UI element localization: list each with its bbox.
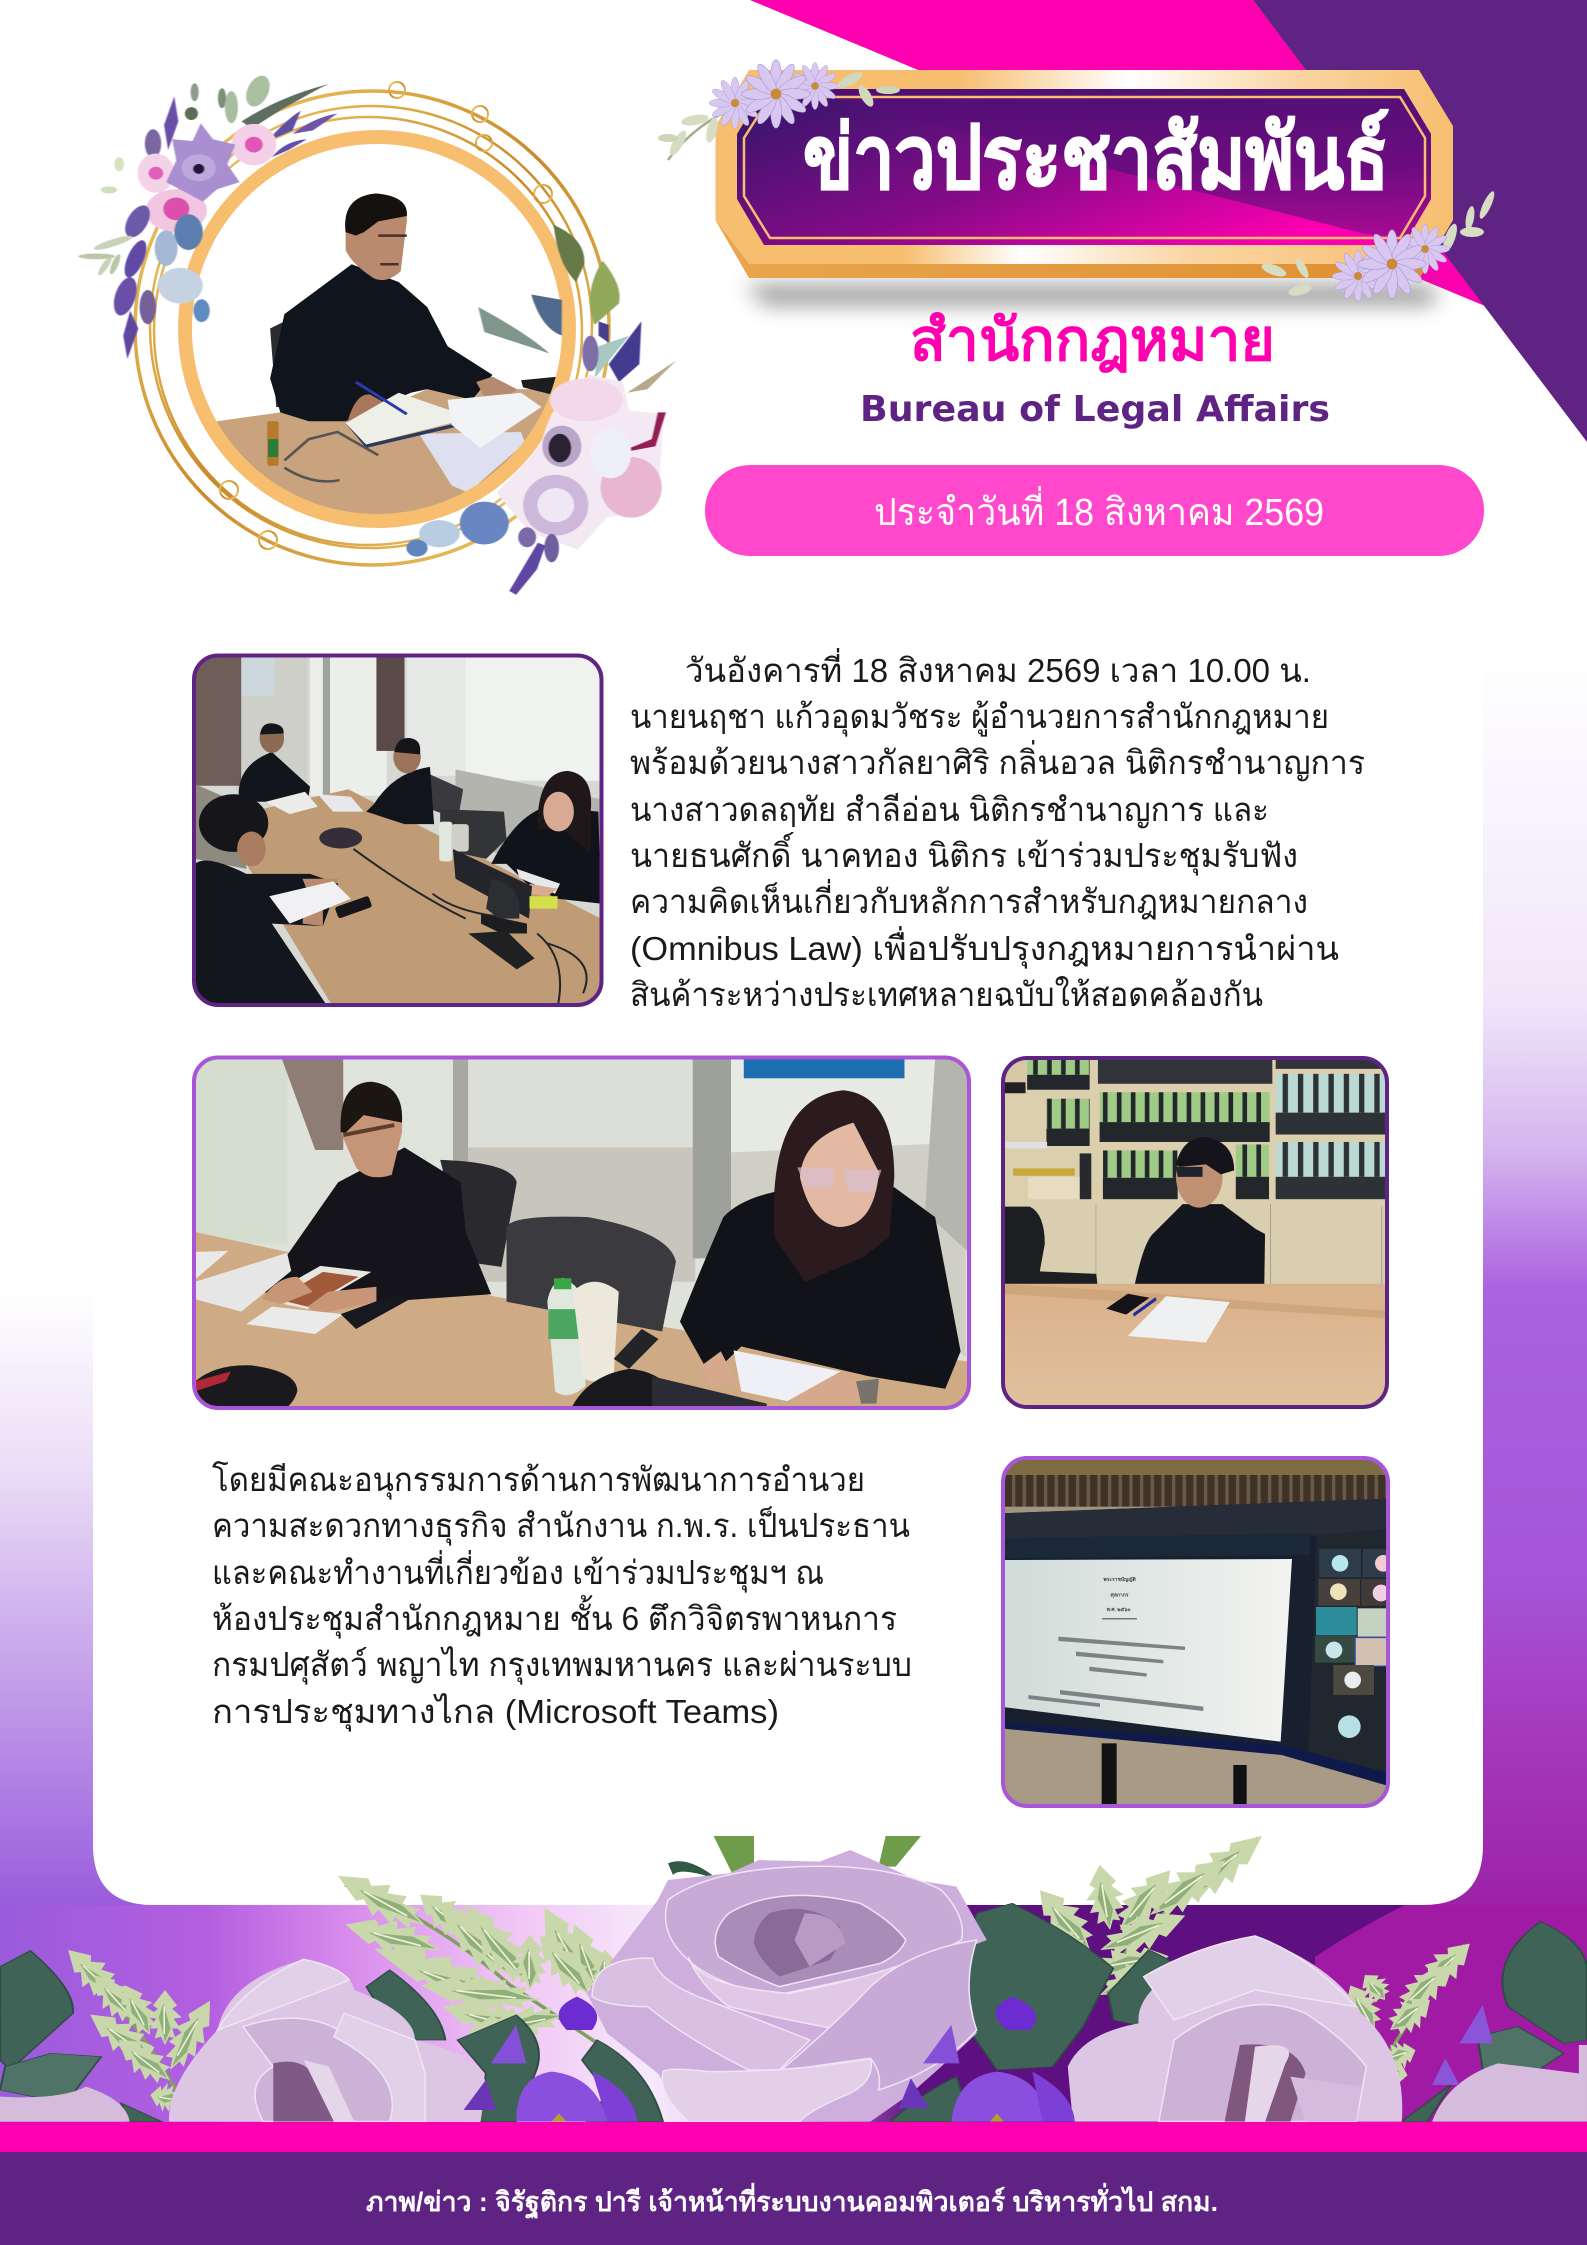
leaves: [0, 1903, 1587, 2122]
date pill: ประจำวันที่ 18 สิงหาคม 2569: [874, 486, 1324, 534]
footer magenta bar: [0, 2122, 1587, 2152]
heading: bureau name English: Bureau of Legal Affairs: [860, 389, 1330, 430]
far right rose: [1432, 2045, 1587, 2122]
text block: second paragraph: การประชุมทางไกล (Microsoft Teams): [212, 1693, 779, 1732]
date pill: [705, 465, 1484, 556]
gold rings: [135, 82, 609, 565]
text block: second paragraph: ความสะดวกทางธุรกิจ สำนักงาน ก.พ.ร. เป็นประธาน: [212, 1506, 910, 1546]
purple petunias: [464, 1997, 1493, 2122]
left rose: [169, 1959, 486, 2122]
photo 4: video conference screen: [1000, 1455, 1397, 1815]
text block: first paragraph: พร้อมด้วยนางสาวกัลยาศิริ กลิ่นอวล นิติกรชำนาญการ: [630, 740, 1365, 781]
header banner: [716, 70, 1453, 306]
floral cluster lower right: [406, 225, 676, 593]
photo 2 frame: [194, 1058, 969, 1408]
text block: second paragraph: ห้องประชุมสำนักกฎหมาย ชั้น 6 ตึกวิจิตรพาหนการ: [212, 1595, 897, 1639]
text block: first paragraph: นางสาวดลฤทัย สำลีอ่อน นิติกรชำนาญการ และ: [630, 791, 1269, 828]
floral border: [0, 1836, 1587, 2122]
ferns behind the floral border: [57, 1821, 1481, 2114]
footer purple bar: [0, 2152, 1587, 2245]
text block: second paragraph: [212, 1461, 912, 1732]
far left rose: [0, 2087, 130, 2122]
portrait medallion: [78, 73, 676, 593]
text block: first paragraph: [630, 648, 1365, 1013]
photo 1 frame: [194, 656, 602, 1005]
banner flowers bottom-right: [1260, 190, 1497, 302]
screen document text: พระราชบัญญัติ: [1103, 1576, 1136, 1583]
right rose: [1068, 1936, 1402, 2122]
banner flowers top-left: [658, 60, 900, 160]
text block: second paragraph: กรมปศุสัตว์ พญาไท กรุงเทพมหานคร และผ่านระบบ: [212, 1646, 912, 1685]
big rose: [587, 1850, 987, 2122]
text block: first paragraph: วันอังคารที่ 18 สิงหาคม 2569 เวลา 10.00 น.: [685, 648, 1311, 689]
screen document text: พ.ศ. ๒๕๖๐: [1107, 1607, 1131, 1613]
decorative corner: magenta triangle: [750, 0, 1485, 306]
text block: first paragraph: สินค้าระหว่างประเทศหลายฉบับให้สอดคล้องกัน: [630, 976, 1263, 1013]
portrait photo: [217, 194, 556, 514]
decorative corner: purple triangle: [1253, 0, 1587, 442]
text block: first paragraph: นายนฤชา แก้วอุดมวัชระ ผู้อำนวยการสำนักกฎหมาย: [630, 698, 1329, 737]
photo 1: meeting table overview: [192, 653, 605, 1009]
photo 2: two officers at table: [192, 1055, 972, 1416]
banner title: ข่าวประชาสัมพันธ์: [803, 108, 1389, 207]
buds and stems: [668, 1836, 921, 1880]
text block: second paragraph: และคณะทำงานที่เกี่ยวข้อง เข้าร่วมประชุมฯ ณ: [212, 1550, 824, 1593]
text block: first paragraph: ความคิดเห็นเกี่ยวกับหลักการสำหรับกฎหมายกลาง: [630, 879, 1308, 920]
screen document text: ศุลกากร: [1111, 1592, 1129, 1598]
white content card: [93, 600, 1483, 1905]
photo 3 frame: [1003, 1058, 1387, 1407]
text block: second paragraph: โดยมีคณะอนุกรรมการด้านการพัฒนาการอำนวย: [212, 1461, 865, 1500]
peach ring: [185, 137, 569, 521]
floral cluster upper left: [78, 73, 337, 359]
screen document text: [1103, 1576, 1136, 1613]
footer credit: ภาพ/ข่าว : จิรัฐติกร ปารี เจ้าหน้าที่ระบบงานคอมพิวเตอร์ บริหารทั่วไป สกม.: [366, 2182, 1218, 2220]
text block: first paragraph: นายธนศักดิ์ นาคทอง นิติกร เข้าร่วมประชุมรับฟัง: [630, 832, 1298, 876]
heading: bureau name Thai: สำนักกฎหมาย: [910, 308, 1275, 373]
text block: first paragraph: (Omnibus Law) เพื่อปรับปรุงกฎหมายการนำผ่าน: [630, 926, 1339, 969]
photo 3: staff member and binders: [1000, 1055, 1394, 1421]
photo 4 frame: [1003, 1458, 1388, 1806]
